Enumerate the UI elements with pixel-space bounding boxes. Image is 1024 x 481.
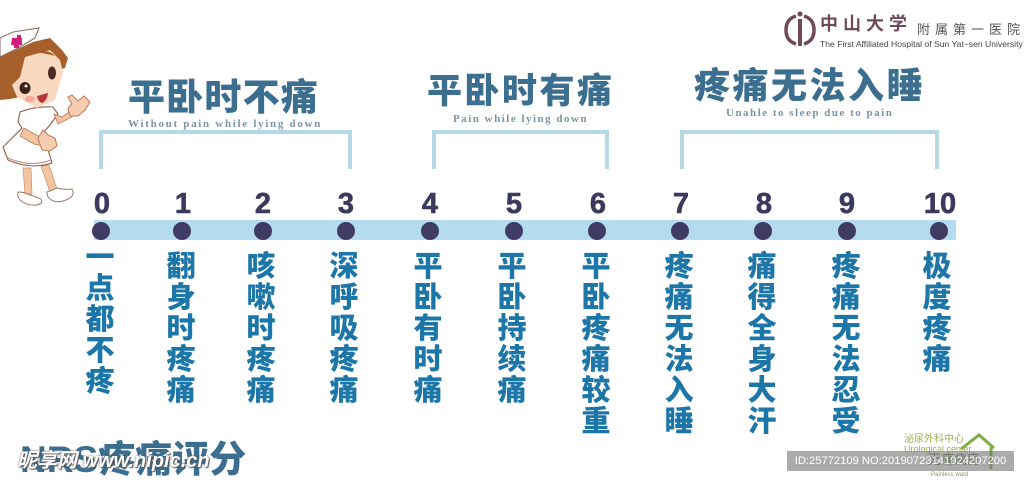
pain scale axis [94,220,956,240]
description: level 5: 平 [497,251,526,283]
description: level 7: 无 [664,313,694,345]
scale numbers: 2 [255,188,271,220]
heading: no pain lying down: 平卧时不痛 [128,77,319,118]
description: level 8: 全 [747,313,776,345]
description: level 5: 续 [497,344,526,376]
description: level 3 [329,251,358,407]
description: level 6: 疼 [581,313,610,345]
description: level 3: 吸 [329,313,358,345]
description: level 3: 疼 [329,344,358,376]
logo ward English: Painless ward [931,472,968,478]
description: level 6: 卧 [581,282,610,314]
description: level 7: 疼 [664,251,694,283]
footer title: NRS疼痛评分 [20,439,246,480]
description: level 6 [581,251,610,438]
description: level 1: 时 [166,313,196,345]
description: level 8 [747,250,776,438]
logo Chinese name: 中山大学 [820,14,912,34]
description: level 6: 痛 [581,344,610,376]
description: level 8: 汗 [747,406,776,438]
description: level 5: 卧 [497,282,526,314]
logo department: 附属第一医院 [917,22,1024,37]
heading: unable to sleep: 疼痛无法入睡 [694,65,925,106]
logo text: 泌尿外科中心 [904,434,964,445]
scale dots [92,222,948,240]
description: level 8: 痛 [747,251,776,283]
logo mark [784,12,816,46]
logo English name: The First Affiliated Hospital of Sun Yat−sen University [820,39,1023,49]
scale numbers: 9 [839,188,855,220]
description: level 5: 持 [497,313,526,345]
description: level 10: 极 [922,251,952,283]
description: level 9: 痛 [831,282,860,314]
description: level 7: 痛 [664,282,694,314]
scale numbers: 1 [175,188,191,220]
description: level 6: 重 [581,406,610,438]
bracket: 4 to 6 [432,130,609,169]
description: level 0: 疼 [85,366,114,398]
description: level 6: 较 [581,375,610,407]
description: level 2: 时 [246,313,276,345]
description: level 7: 入 [664,375,694,407]
scale numbers: 6 [590,188,606,220]
description: level 1: 身 [166,282,196,314]
scale numbers: 0 [94,188,110,220]
description: level 4: 时 [413,344,442,376]
description: level 2: 嗽 [246,282,276,314]
description: level 7 [664,250,694,438]
description: level 4: 平 [413,251,442,283]
bracket: 7 to 10 [680,130,939,169]
description: level 9: 忍 [831,375,860,407]
description: level 4: 痛 [413,375,442,407]
description: level 9 [831,250,860,438]
description: level 0: 点 [85,273,114,305]
subheading: unable to sleep: Unahle to sleep due to pain [726,107,893,119]
description: level 0: 一 [85,242,114,274]
description: level 4 [413,251,442,407]
description: level 9: 疼 [831,251,860,283]
logo: hospital [784,12,1024,49]
description: level 5 [497,251,526,407]
scale numbers: 10 [924,188,956,220]
logo ward text: 无痛病房 [928,452,980,467]
description: level 1: 痛 [166,375,196,407]
description: level 7: 睡 [664,406,694,438]
description: level 9: 无 [831,313,860,345]
watermark: site name: 昵享网 www.nipic.cn [17,450,210,472]
description: level 1: 翻 [166,251,196,283]
scale numbers: 3 [338,188,354,220]
description: level 2: 咳 [246,251,276,283]
description: level 10: 痛 [922,344,952,376]
description: level 5: 痛 [497,375,526,407]
description: level 2 [246,250,276,407]
description: level 9: 法 [831,344,860,376]
description: level 4: 卧 [413,282,442,314]
scale numbers: 8 [756,188,772,220]
scale numbers: 5 [506,188,522,220]
subheading: pain lying: Pain while lying down [453,113,588,125]
description: level 0: 都 [85,304,114,336]
description: level 0: 不 [85,335,114,367]
description: level 0 [85,242,114,398]
logo: urological center [904,433,995,478]
description: level 6: 平 [581,251,610,283]
watermark: image id: ID:25772109 NO:20190723141924207200 [795,455,1006,467]
description: level 10: 度 [922,282,952,314]
description: level 3: 呼 [329,282,358,314]
illustration: nurse mascot [0,27,91,206]
description: level 10: 疼 [922,313,952,345]
description: level 3: 深 [329,251,358,283]
description: level 7: 法 [664,344,694,376]
subheading: without pain: Without pain while lying down [128,118,322,130]
heading: pain lying down: 平卧时有痛 [427,72,615,111]
bracket: 0 to 3 [99,130,352,169]
description: level 1 [166,251,196,407]
description: level 8: 大 [747,375,776,407]
description: level 2: 疼 [246,344,276,376]
scale numbers: 4 [422,188,438,220]
scale numbers [94,188,956,220]
scale numbers: 7 [673,188,689,220]
description: level 8: 身 [747,344,776,376]
description: level 4: 有 [413,313,442,345]
logo English: Urological center [904,444,972,454]
description: level 2: 痛 [246,375,276,407]
description: level 10 [922,251,952,376]
logo house icon [960,433,995,469]
description: level 8: 得 [747,282,776,314]
description: level 9: 受 [831,406,860,438]
watermark: image id [787,451,1014,471]
description: level 3: 痛 [329,375,358,407]
description: level 1: 疼 [166,344,196,376]
